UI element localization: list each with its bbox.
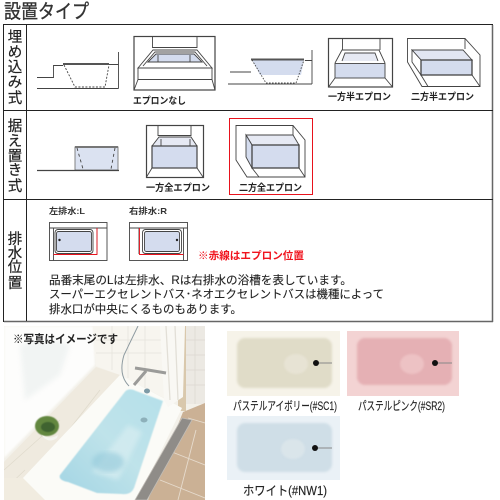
label: white: ホワイト(#NW1) [243, 484, 327, 498]
label: one-side full apron: 一方全エプロン [146, 182, 210, 194]
heading: drain position row: 位 [8, 259, 22, 276]
swatch: white [227, 416, 340, 498]
diagram: one-and-a-half apron [328, 38, 392, 87]
diagram: right drain plan [130, 222, 188, 260]
diagram: one-side full apron [146, 126, 204, 178]
label: pastel ivory: パステルアイボリー(#SC1) [233, 399, 337, 413]
heading: built-in row [8, 29, 23, 107]
text block: drain notes: 排水口が中央にくるものもあります。 [49, 302, 242, 316]
label: left drain: 左排水:L [49, 206, 85, 216]
heading: freestanding row: き [8, 162, 22, 179]
label: no apron: エプロンなし [133, 96, 186, 107]
heading: built-in row: み [8, 75, 22, 91]
heading: built-in row: め [8, 44, 22, 61]
diagram: section half apron [228, 50, 312, 84]
heading: built-in row: 込 [8, 59, 22, 76]
label: two-side half apron: 二方半エプロン [411, 91, 474, 103]
panel: installation type table [4, 24, 493, 322]
diagram: no apron [134, 36, 215, 90]
text block: drain notes: スーパーエクセレントバス･ネオエクセレントバスは機種によって [49, 287, 384, 301]
heading: drain position row [8, 231, 23, 292]
text block: drain notes: 品番末尾のLは左排水、Rは右排水の浴槽を表しています。 [49, 273, 352, 287]
swatch: pastel ivory [227, 331, 340, 413]
caption: image note: ※写真はイメージです [13, 332, 118, 346]
diagram: left drain plan [50, 222, 107, 260]
note: red line: ※赤線はエプロン位置 [198, 249, 305, 262]
swatch: pastel pink [347, 331, 459, 413]
photo: bathtub [4, 326, 205, 500]
diagram: two-side half apron [408, 38, 480, 86]
heading: drain position row: 水 [8, 245, 23, 262]
diagram: two-side full apron [236, 126, 305, 177]
heading: freestanding row: 据 [8, 118, 22, 135]
text block: drain notes [49, 273, 384, 316]
diagram: section no apron [37, 52, 118, 88]
diagram: section freestanding [37, 147, 119, 170]
heading: freestanding row: 式 [8, 178, 23, 195]
heading: built-in row: 埋 [8, 29, 22, 46]
label: pastel pink: パステルピンク(#SR2) [358, 399, 445, 413]
heading: built-in row: 式 [8, 90, 23, 107]
highlight: two-side full apron [230, 118, 312, 194]
heading: drain position row: 置 [8, 276, 22, 292]
heading: freestanding row: 置 [8, 149, 22, 165]
label: two-side full apron: 二方全エプロン [239, 182, 302, 194]
heading: freestanding row [8, 118, 23, 195]
heading: freestanding row: え [8, 134, 22, 150]
title: 設置タイプ [4, 1, 89, 23]
heading: drain position row: 排 [8, 231, 22, 248]
label: right drain: 右排水:R [129, 206, 167, 216]
label: one-and-a-half apron: 一方半エプロン [328, 91, 391, 103]
